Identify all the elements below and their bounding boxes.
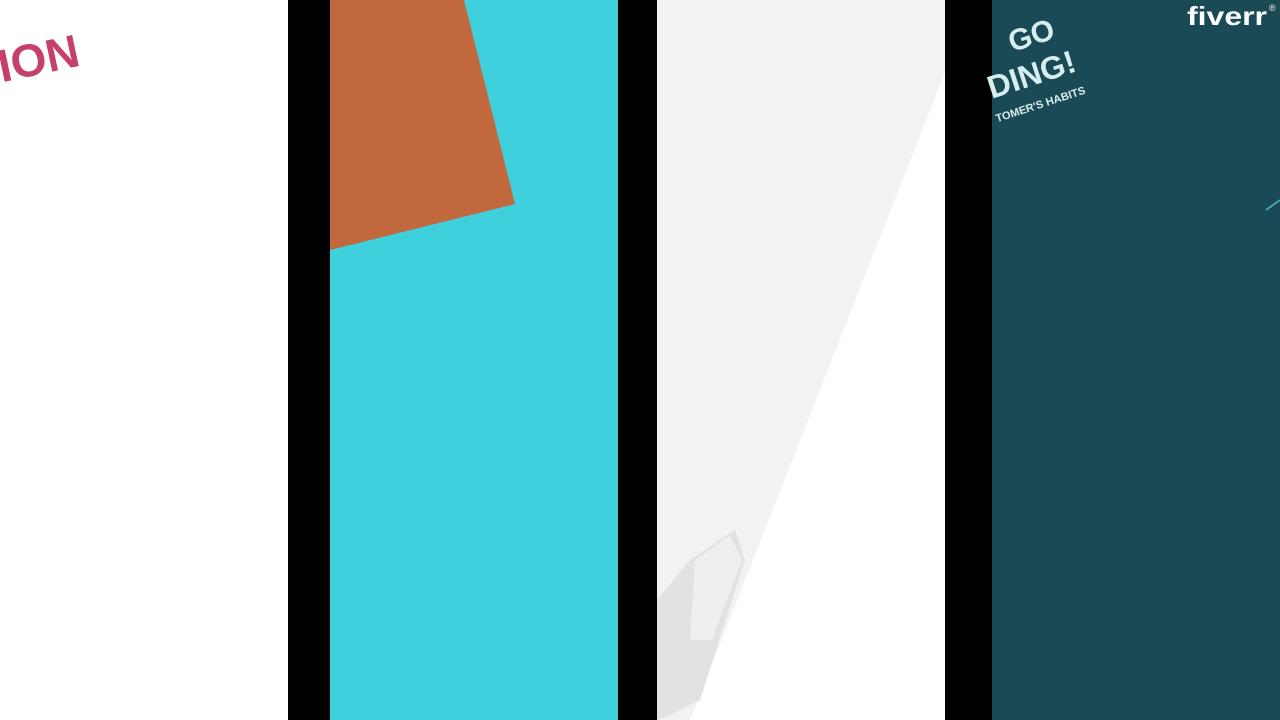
orange block [330,0,515,250]
panel: teal: ® [1269,3,1276,13]
black separator 3 [945,0,992,720]
panel: white left [0,0,288,720]
title fragment: GO [1004,13,1059,59]
title fragment: DING! [983,43,1080,106]
panel: cyan [330,0,618,720]
black separator 2 [618,0,657,720]
title fragment [970,10,1087,125]
logo: fiverr: fiverr [1187,1,1267,31]
black separator 1 [288,0,330,720]
panel: light gray photo [657,0,945,720]
photo fragment: building [657,530,745,720]
line fragment [1266,200,1280,210]
panel: teal [970,0,1280,720]
title fragment: TOMER'S HABITS [994,85,1087,125]
